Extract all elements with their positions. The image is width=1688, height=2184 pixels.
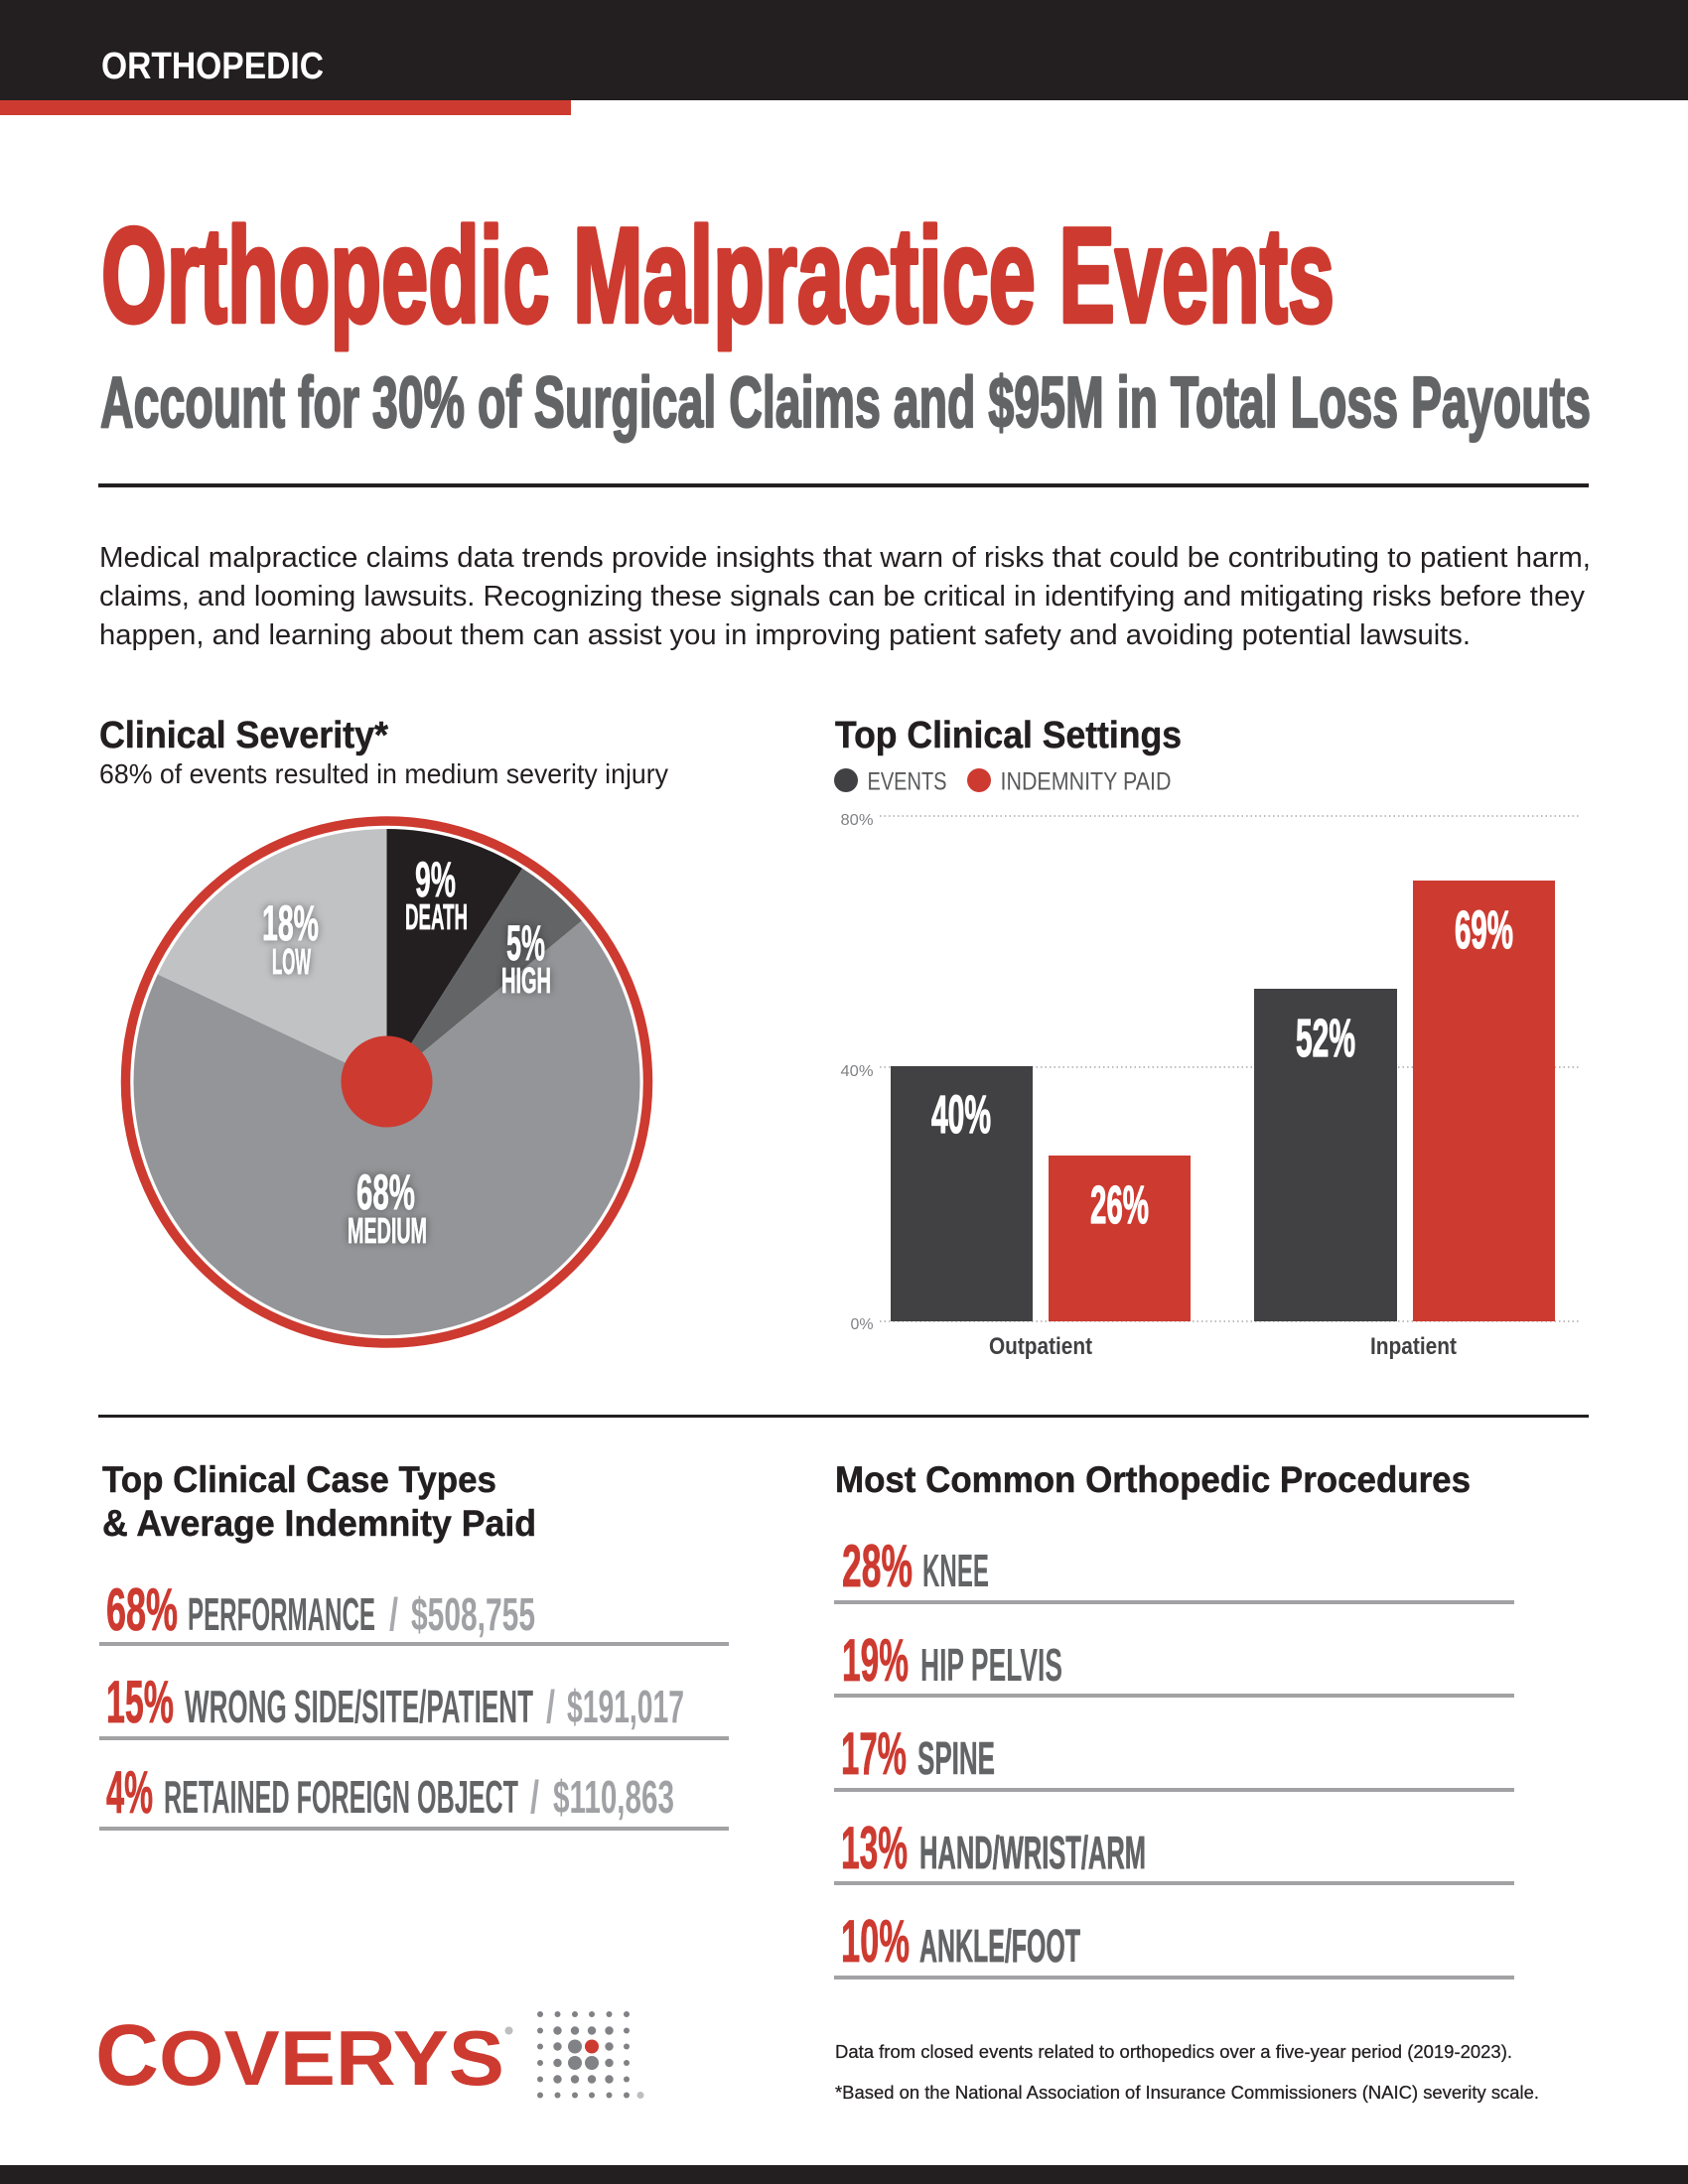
label: death [405,852,468,937]
axis labels: 40% [840,1063,874,1080]
category labels: Outpatient [989,1333,1092,1360]
label: low: LOW [272,941,311,982]
header label: ORTHOPEDIC [101,46,324,87]
bar: inpatient indemnity 69% [1413,881,1555,1321]
row: knee: 28% [842,1533,913,1599]
row: performance [99,1576,729,1646]
label: death: 9% [415,852,456,907]
row: performance: / [389,1588,398,1640]
row: knee: KNEE [922,1545,989,1596]
pie center dot [342,1036,433,1128]
heading: case types [102,1459,536,1544]
row: wrong side [99,1669,729,1740]
row: spine: SPINE [917,1732,995,1784]
logo: coverys: OVERYS [159,2014,504,2102]
row: spine: 17% [841,1720,907,1787]
row: performance: $508,755 [411,1588,535,1640]
panel: clinical severity [99,715,668,1343]
footnotes [835,2042,1539,2103]
panel: procedures [834,1459,1514,1979]
header bar [0,0,1688,115]
icon: dot grid [537,2011,643,2099]
bar: inpatient events 52%: 52% [1296,1009,1355,1068]
axis labels: 80% [840,812,874,829]
heading: case types: & Average Indemnity Paid [102,1503,536,1544]
heading: top clinical settings: Top Clinical Settings [835,715,1182,756]
heading: clinical severity: Clinical Severity* [99,715,388,756]
heading: case types: Top Clinical Case Types [102,1459,496,1500]
label: medium: MEDIUM [348,1210,427,1251]
footer bar [0,2165,1688,2184]
row: wrong side: / [546,1681,555,1732]
legend [834,768,1172,796]
bar: outpatient indemnity 26% [1049,1156,1191,1321]
bar: inpatient indemnity 69%: 69% [1455,900,1513,960]
axis labels: 0% [850,1316,874,1333]
row: hand wrist arm: HAND/WRIST/ARM [919,1827,1146,1878]
category labels [989,1333,1457,1360]
label: high: 5% [506,915,545,971]
legend: EVENTS [868,768,947,796]
legend: INDEMNITY PAID [1001,768,1172,796]
heading: procedures: Most Common Orthopedic Procedures [835,1459,1471,1500]
intro paragraph: claims, and looming lawsuits. Recognizing these signals can be critical in identifying and mitigating risks before they [99,581,1585,613]
bar: outpatient events 40% [891,1066,1033,1321]
slice: high [387,869,582,1082]
footnotes: *Based on the National Association of Insurance Commissioners (NAIC) severity scale. [835,2083,1539,2103]
axis labels [840,812,874,1333]
row: wrong side: 15% [106,1669,174,1735]
row: ankle foot: 10% [841,1908,910,1975]
footnotes: Data from closed events related to orthopedics over a five-year period (2019-2023). [835,2042,1512,2062]
intro paragraph: Medical malpractice claims data trends provide insights that warn of risks that could be contributing to patient harm, [99,542,1591,574]
slice: low [158,829,387,1082]
bar: outpatient events 40%: 40% [931,1085,991,1145]
intro paragraph: happen, and learning about them can assist you in improving patient safety and avoiding potential lawsuits. [99,619,1471,651]
label: death: DEATH [405,896,468,937]
label: high [501,915,551,1001]
label: low: 18% [262,895,319,951]
row: ankle foot: ANKLE/FOOT [919,1920,1080,1972]
slice: medium [134,921,640,1335]
label: high: HIGH [501,960,551,1001]
bar: outpatient indemnity 26%: 26% [1090,1175,1149,1235]
row: hand wrist arm: 13% [841,1815,908,1881]
row: hip pelvis: 19% [842,1627,909,1694]
row: hand wrist arm [834,1815,1514,1885]
row: hip pelvis [834,1627,1514,1698]
row: hip pelvis: HIP PELVIS [920,1639,1062,1691]
intro paragraph [99,542,1591,651]
bar chart [840,812,1579,1360]
row: ankle foot [834,1908,1514,1979]
row: retained foreign object: 4% [106,1759,153,1826]
row: wrong side: WRONG SIDE/SITE/PATIENT [185,1681,533,1732]
row: retained foreign object: RETAINED FOREIGN OBJECT [164,1771,518,1823]
row: performance: PERFORMANCE [188,1588,375,1640]
category labels: Inpatient [1370,1333,1457,1360]
row: spine [834,1720,1514,1792]
row: retained foreign object [99,1759,729,1831]
severity subheading: 68% of events resulted in medium severity injury [99,758,668,789]
row: performance: 68% [106,1576,178,1643]
panel: case types [99,1459,729,1831]
row: retained foreign object: $110,863 [553,1771,674,1823]
slice: death [387,829,522,1082]
logo: coverys: C [95,2007,159,2104]
logo: coverys [95,2007,643,2104]
row: wrong side: $191,017 [567,1681,684,1732]
label: medium [348,1164,427,1251]
label: low [262,895,319,982]
label: medium: 68% [356,1164,415,1220]
panel: top clinical settings [834,715,1579,1360]
bar: inpatient events 52% [1254,989,1397,1321]
row: knee [834,1533,1514,1604]
row: retained foreign object: / [530,1771,539,1823]
pie chart [125,821,647,1343]
